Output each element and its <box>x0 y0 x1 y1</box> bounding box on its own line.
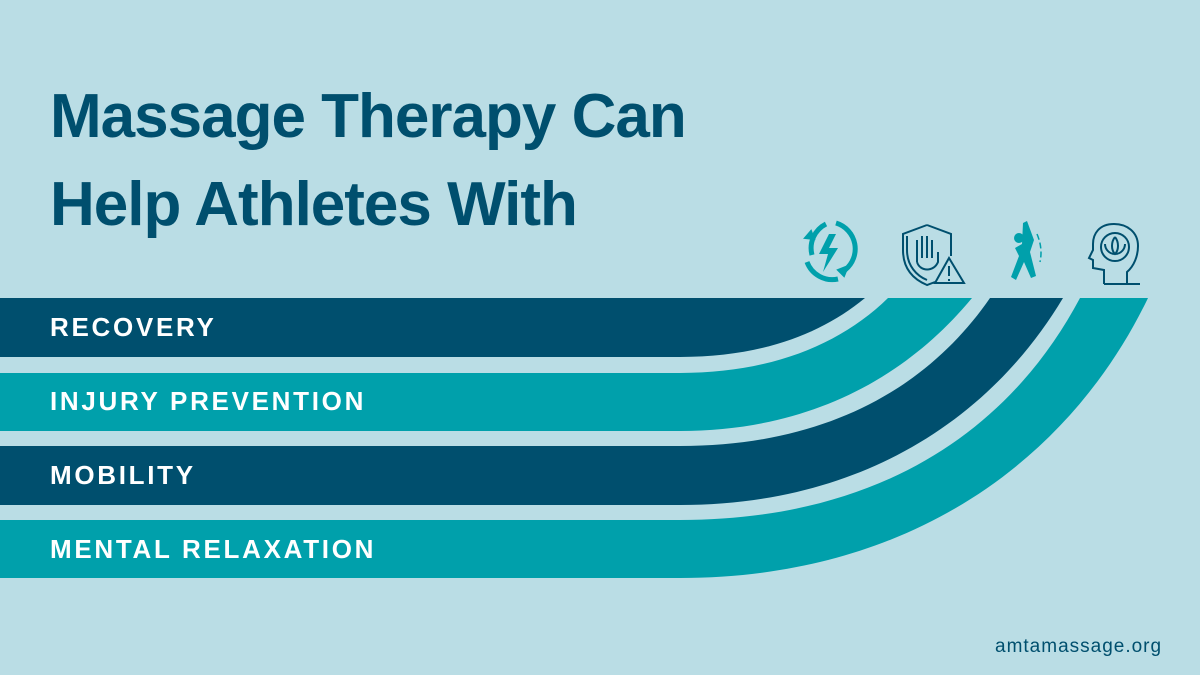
ribbon: mental relaxation <box>0 298 1148 578</box>
label: injury prevention: INJURY PREVENTION <box>50 386 366 416</box>
footer url: amtamassage.org <box>995 636 1162 657</box>
ribbon: injury prevention <box>0 298 972 431</box>
title: Help Athletes With <box>50 170 577 239</box>
label: mental relaxation: MENTAL RELAXATION <box>50 534 376 564</box>
ribbon: recovery <box>0 298 865 357</box>
icon: stretching figure <box>1011 221 1041 280</box>
icon: head with lotus <box>1089 224 1140 284</box>
icon: recovery lightning <box>805 223 855 280</box>
ribbon: mobility <box>0 298 1063 505</box>
title <box>50 82 686 239</box>
label: recovery: RECOVERY <box>50 312 217 342</box>
icon: shield hand warning <box>903 225 964 285</box>
title: Massage Therapy Can <box>50 82 686 151</box>
label: mobility: MOBILITY <box>50 460 196 490</box>
